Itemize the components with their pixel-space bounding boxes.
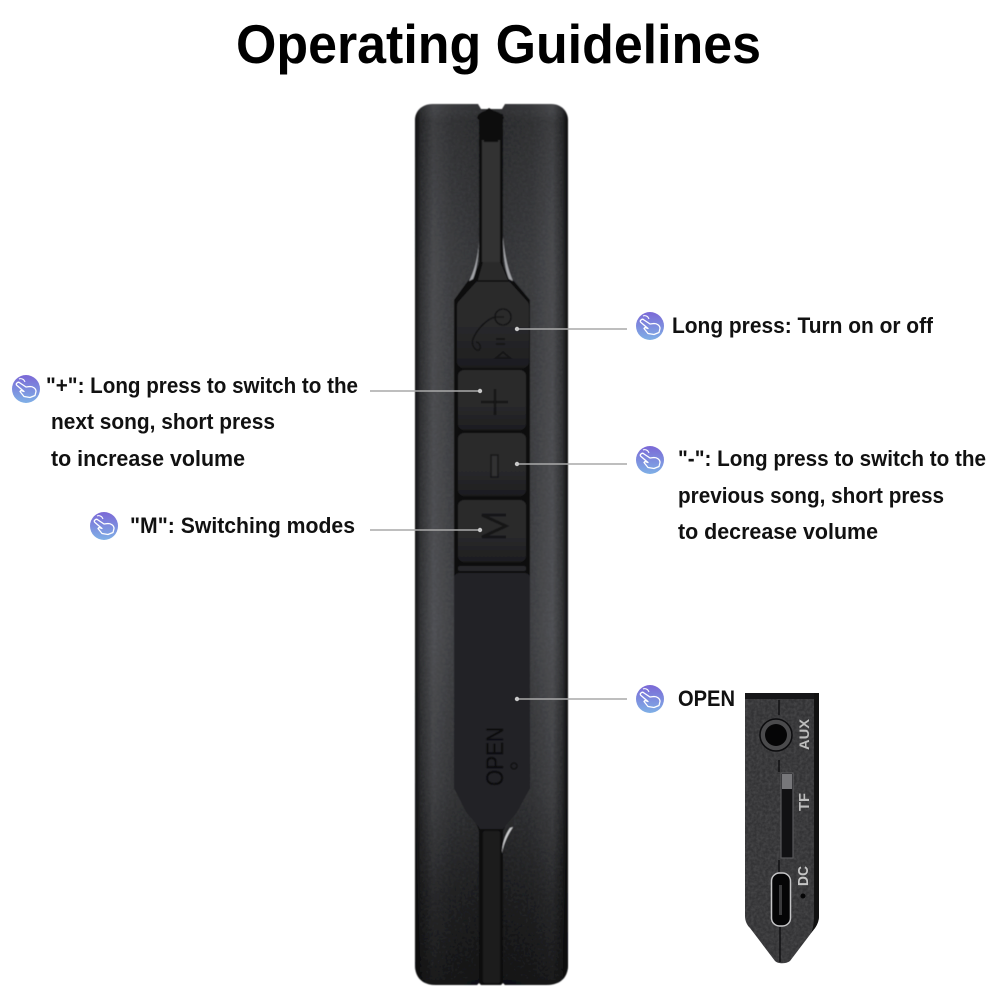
icon: hand press: [90, 512, 118, 540]
title: Operating Guidelines: [236, 13, 761, 75]
device body: [415, 104, 568, 985]
label: to increase volume: [51, 446, 245, 471]
label: to decrease volume: [678, 519, 878, 544]
M button: [458, 500, 526, 562]
device: player side view: [415, 104, 568, 985]
callout: minus button: [515, 446, 986, 544]
separator strip: [458, 566, 526, 571]
open cover: [454, 573, 530, 829]
indicator hole: [800, 894, 806, 898]
label: previous song, short press: [678, 483, 944, 508]
callout: plus button: [12, 373, 482, 471]
channel insert top: [482, 140, 500, 262]
leader line: [515, 462, 627, 466]
DC label: DC: [795, 866, 812, 886]
label: next song, short press: [51, 409, 275, 434]
plus button: [458, 370, 526, 430]
port panel: [745, 693, 819, 963]
label: "+": Long press to switch to the: [46, 373, 358, 398]
callout: power button: [515, 312, 934, 340]
channel insert bottom: [483, 831, 500, 983]
power button: [457, 262, 529, 368]
icon: hand press: [636, 685, 664, 713]
label: [46, 373, 358, 471]
channel and button strip: [454, 114, 530, 985]
zip pull: [477, 108, 504, 142]
lower channel highlight: [502, 827, 513, 854]
icon: hand press: [636, 312, 664, 340]
power and call icon: [472, 309, 511, 358]
leader line: [515, 327, 627, 331]
TF label: TF: [796, 793, 813, 811]
label: OPEN: [678, 686, 735, 711]
leader line: [370, 389, 482, 393]
open cover: OPEN: [482, 727, 509, 786]
icon: hand press: [12, 375, 40, 403]
callout: M button: [90, 512, 482, 540]
USB-C port: [772, 873, 790, 926]
device: port close-up: [745, 693, 819, 963]
TF slot: [781, 773, 793, 858]
label: [678, 446, 986, 544]
label: "M": Switching modes: [130, 513, 355, 538]
AUX jack: [760, 719, 792, 751]
icon: hand press: [636, 446, 664, 474]
callout: open cover: [515, 685, 735, 713]
minus button: [458, 433, 526, 496]
leader line: [515, 697, 627, 701]
label: "-": Long press to switch to the: [678, 446, 986, 471]
leader line: [370, 528, 482, 532]
label: Long press: Turn on or off: [672, 313, 934, 338]
AUX label: AUX: [796, 718, 812, 750]
channel highlights: [469, 236, 513, 281]
